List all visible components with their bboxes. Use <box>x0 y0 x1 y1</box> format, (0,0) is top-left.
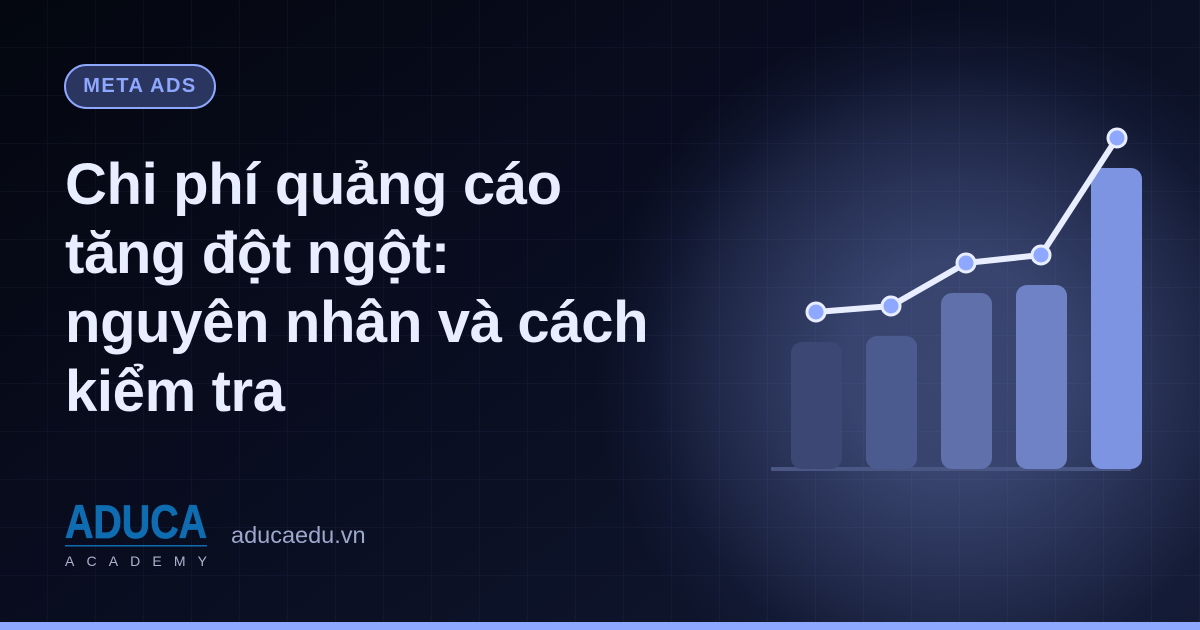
website url: aducaedu.vn <box>231 522 366 548</box>
badge: META ADS <box>64 64 216 109</box>
logo: ADUCA Academy <box>65 498 208 569</box>
chart baseline <box>771 467 1131 471</box>
bottom accent bar <box>0 622 1200 630</box>
logo rule <box>65 545 207 546</box>
chart: rising cost bars with trend line <box>771 128 1142 471</box>
title <box>65 152 648 424</box>
trend line <box>816 138 1117 312</box>
title: kiểm tra <box>65 359 285 424</box>
badge: META ADS: META ADS <box>83 75 197 97</box>
trend points <box>807 129 1126 321</box>
title: Chi phí quảng cáo <box>65 152 562 217</box>
bars <box>791 168 1142 469</box>
title: nguyên nhân và cách <box>65 290 648 355</box>
title: tăng đột ngột: <box>65 221 450 286</box>
logo subtitle: ACADEMY <box>65 553 208 569</box>
